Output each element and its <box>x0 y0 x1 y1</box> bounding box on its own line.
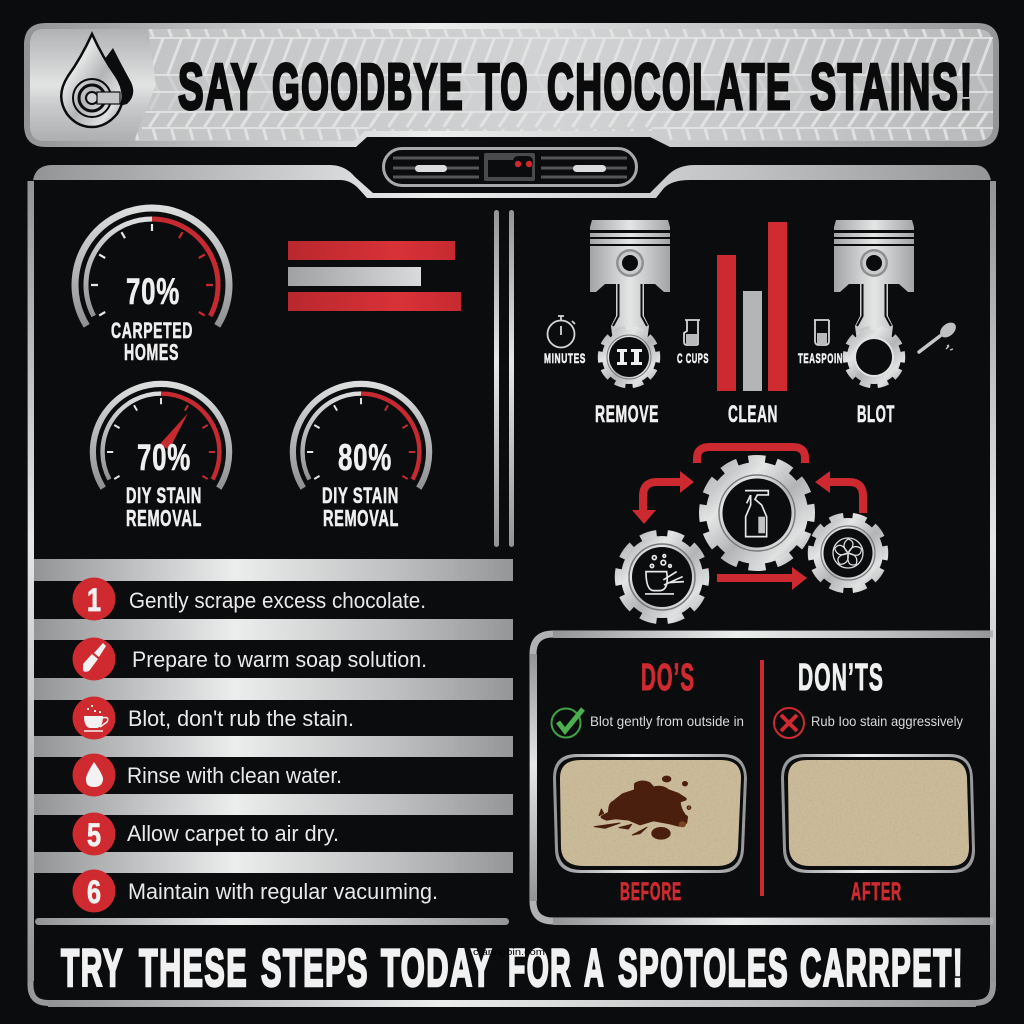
arrow: right loop <box>815 471 863 513</box>
icon: stopwatch <box>548 316 575 348</box>
gear: spray bottle <box>703 459 811 567</box>
chocolate stain <box>594 777 690 838</box>
footer call to action: TODAY <box>381 939 493 998</box>
footer call to action: A <box>584 939 605 998</box>
footer call to action: SPOTOLES <box>618 939 789 998</box>
gear: cup and hand <box>618 533 706 621</box>
footer call to action: STEPS <box>261 939 369 998</box>
title banner <box>24 23 999 147</box>
heading: don'ts: DON’TS <box>798 657 884 699</box>
arrow: left loop <box>632 471 694 524</box>
title: TO <box>478 50 529 123</box>
panel frame <box>533 634 993 921</box>
footer call to action: FOR <box>508 939 572 998</box>
step 5 <box>72 812 339 856</box>
panel: do's and don'ts <box>530 631 993 925</box>
gauge needle <box>160 413 188 450</box>
step 3: Blot, don't rub the stain. <box>128 706 354 731</box>
gauge: DIY stain removal 70%: REMOVAL <box>126 505 202 531</box>
gauge: carpeted homes 70% <box>75 208 229 365</box>
icon: fan <box>833 538 863 568</box>
step 1: 1 <box>87 582 101 618</box>
label: remove: REMOVE <box>595 401 659 428</box>
center divider <box>760 660 764 896</box>
step 1 <box>72 578 426 620</box>
gauge: DIY stain removal 70%: DIY STAIN <box>126 483 202 508</box>
watermark: c.anngbin.com <box>473 947 545 958</box>
gauge: carpeted homes 70%: HOMES <box>124 339 179 365</box>
piston: remove <box>590 220 670 386</box>
footer call to action <box>61 939 964 998</box>
vertical bar chart <box>717 222 787 391</box>
gear with I-beam icon <box>600 328 658 386</box>
label: clean: CLEAN <box>728 401 778 428</box>
icon: spoon <box>919 320 959 352</box>
gauge: DIY stain removal 80%: DIY STAIN <box>322 483 399 508</box>
label: teaspoon: TEASPOIN <box>798 350 843 366</box>
gauge: DIY stain removal 70% <box>93 384 229 531</box>
gauge: DIY stain removal 80%: 80% <box>338 437 392 478</box>
gauge: DIY stain removal 70%: 70% <box>137 437 191 478</box>
title: GOODBYE <box>272 50 464 123</box>
label: blot: BLOT <box>857 401 895 428</box>
step 6 <box>72 870 438 912</box>
arrow: bottom <box>717 567 807 590</box>
bottom left divider <box>35 918 509 925</box>
gauge: DIY stain removal 80% <box>293 384 429 531</box>
logo panel <box>30 29 156 141</box>
title: CHOCOLATE <box>547 50 792 123</box>
step 5: Allow carpet to air dry. <box>127 821 339 846</box>
do text: Blot gently from outside in <box>590 713 744 729</box>
step 6: Maintain with regular vacuıming. <box>128 879 438 904</box>
gauge: DIY stain removal 80%: REMOVAL <box>323 505 399 531</box>
carpet: before <box>553 754 747 873</box>
icon: red cross <box>774 708 804 738</box>
step 6: 6 <box>87 874 101 910</box>
banner tread surface <box>30 29 993 141</box>
heading: do's: DO’S <box>641 657 695 699</box>
step 2 <box>72 638 427 680</box>
label: cups: C CUPS <box>677 350 709 366</box>
gauge: carpeted homes 70%: 70% <box>126 271 180 312</box>
carpet: after <box>781 754 975 873</box>
label: after: AFTER <box>851 878 902 906</box>
gear with open ring <box>846 328 902 386</box>
footer call to action: THESE <box>139 939 248 998</box>
step 3 <box>72 696 354 740</box>
main frame <box>28 165 996 1007</box>
don't text: Rub Ioo stain aggressively <box>811 713 963 729</box>
icon: spray bottle <box>745 491 768 537</box>
vertical dividers <box>494 210 514 547</box>
piston: blot <box>834 220 914 386</box>
banner plate <box>24 23 999 147</box>
label: before: BEFORE <box>620 878 682 906</box>
arrow: top bracket <box>697 447 805 463</box>
title: SAY <box>178 50 258 123</box>
gear: fan <box>810 516 886 590</box>
step 1: Gently scrape excess chocolate. <box>129 588 426 613</box>
step 4 <box>72 754 342 796</box>
gauge: carpeted homes 70%: CARPETED <box>111 318 193 343</box>
step 2: Prepare to warm soap solution. <box>132 647 427 672</box>
icon: cup with hand <box>645 555 684 594</box>
icon: green check <box>552 708 583 738</box>
icon: beaker <box>684 320 700 345</box>
label: minutes: MINUTES <box>544 350 586 366</box>
step 4: Rinse with clean water. <box>127 763 342 788</box>
vent ornament <box>384 148 636 186</box>
footer call to action: TRY <box>61 939 124 998</box>
horizontal bar chart <box>288 241 461 311</box>
icon: oil drop logo <box>61 34 133 127</box>
title <box>178 50 974 123</box>
panel: six steps <box>34 559 513 912</box>
icon: test tube <box>814 320 829 345</box>
step 5: 5 <box>87 817 101 853</box>
